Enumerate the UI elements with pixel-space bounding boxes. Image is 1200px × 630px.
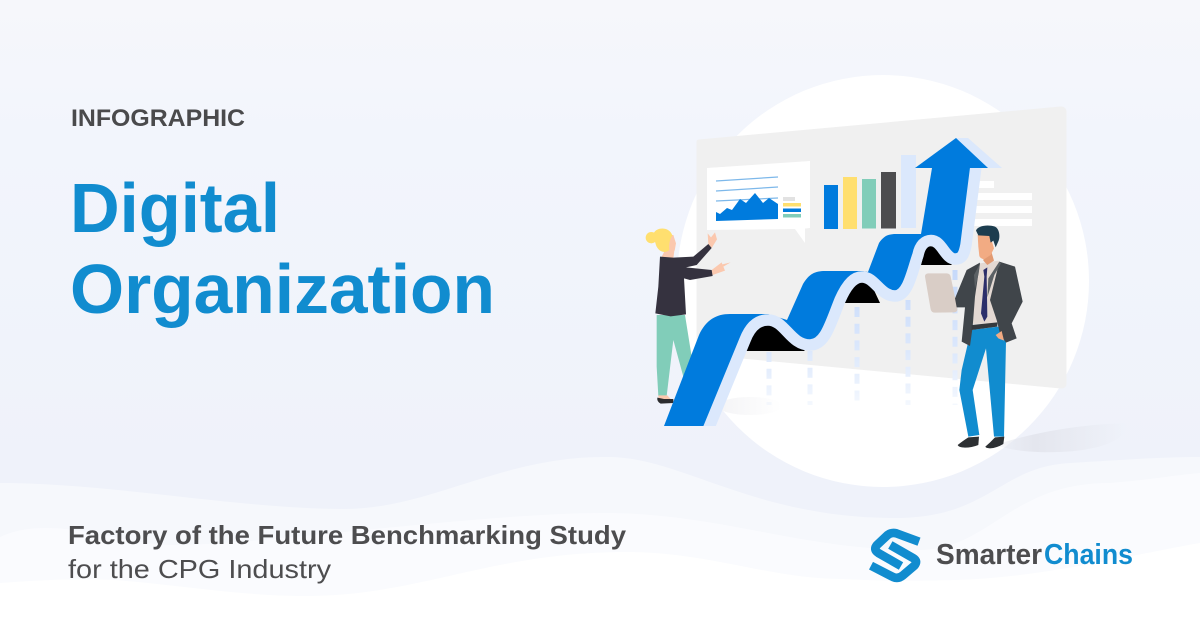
title	[70, 169, 495, 328]
kicker: INFOGRAPHIC: INFOGRAPHIC	[71, 105, 245, 132]
speech bubble with area chart	[707, 161, 810, 243]
man figure	[925, 225, 1023, 448]
logo wordmark	[936, 539, 1133, 571]
board text lines	[973, 181, 1032, 226]
subtitle: for the CPG Industry	[68, 554, 331, 584]
dashed support lines	[769, 270, 955, 405]
logo wordmark: Chains	[1044, 539, 1133, 571]
shadow: man	[995, 423, 1127, 452]
bar chart	[824, 155, 916, 229]
rising ribbon arrow	[664, 138, 1002, 436]
woman figure	[646, 228, 731, 404]
title: Digital	[70, 169, 280, 247]
logo wordmark: Smarter	[936, 539, 1042, 571]
logo mark	[871, 533, 919, 578]
illustration backdrop circle	[677, 75, 1089, 487]
subtitle: Factory of the Future Benchmarking Study	[68, 520, 627, 550]
title: Organization	[70, 250, 495, 328]
presentation board	[699, 109, 1064, 386]
shadow: woman	[718, 397, 782, 415]
subtitle	[68, 520, 627, 584]
